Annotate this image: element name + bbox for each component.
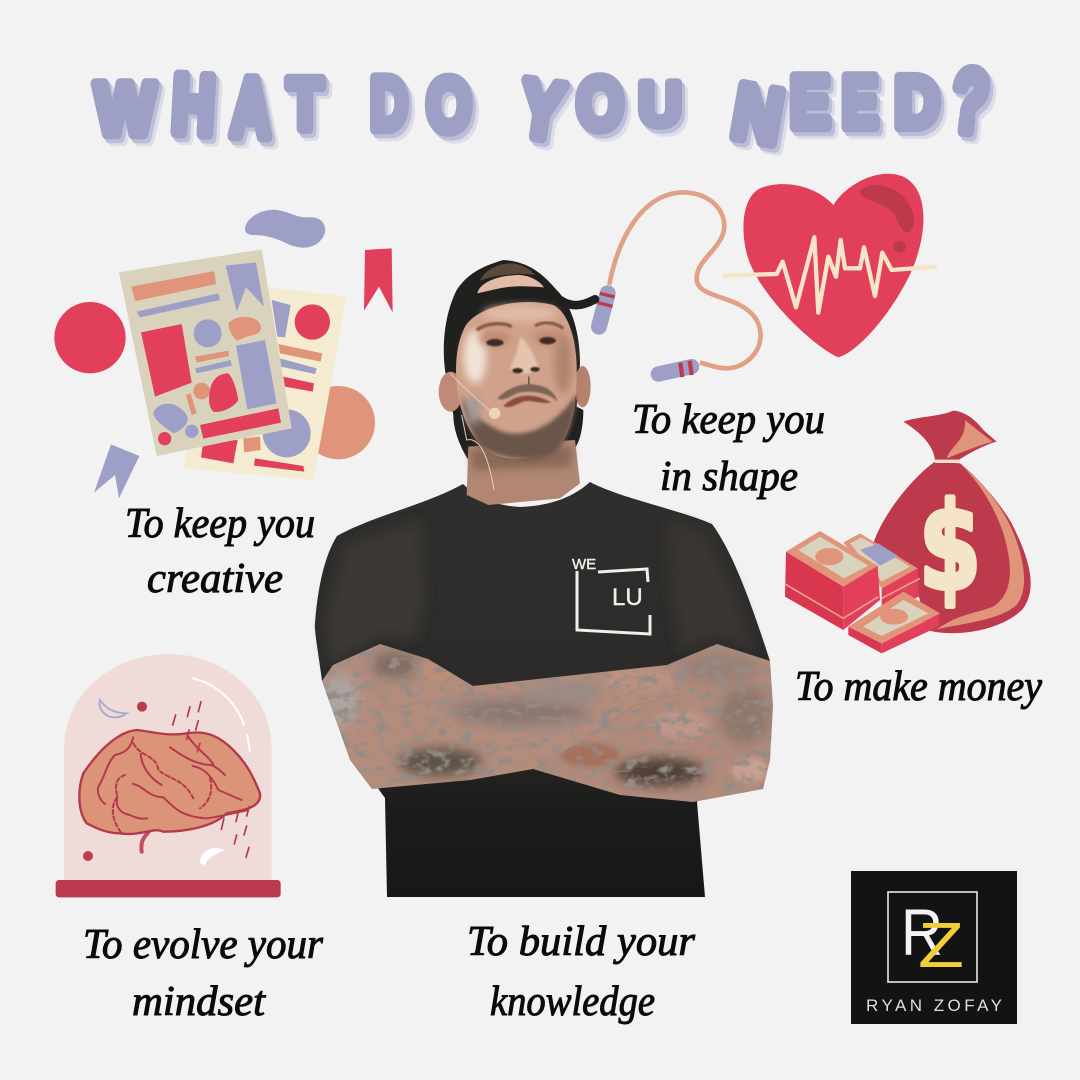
eyebrows [477, 324, 512, 330]
title: What do you need?: H [170, 58, 217, 153]
head [439, 260, 595, 505]
nose [510, 337, 538, 374]
title: What do you need?: ? [947, 51, 993, 152]
caption: to evolve your mindset: mindset [132, 979, 266, 1025]
caption: to make money: To make money [795, 664, 1042, 710]
lower crossed arm [533, 644, 773, 802]
caption: to keep you creative [125, 501, 315, 602]
rope [609, 192, 761, 368]
caption: to keep you in shape: To keep you [632, 397, 825, 443]
lower handle [658, 361, 692, 377]
neck [467, 440, 580, 505]
bag neck [903, 411, 997, 460]
left cash stack [785, 531, 880, 630]
caption: to keep you in shape: in shape [660, 454, 798, 500]
title: What do you need?: N [726, 68, 789, 161]
dome base [56, 880, 281, 897]
shirt logo: WE LU [572, 556, 650, 634]
title: What do you need?: T [287, 64, 323, 144]
person: man with crossed arms [310, 260, 790, 897]
bag side [937, 465, 1024, 629]
title: What do you need?: O [577, 63, 623, 145]
upper crossed arm [322, 644, 680, 789]
shirt [315, 482, 770, 897]
upper handle [598, 293, 615, 327]
logo: Ryan Zofay [851, 871, 1017, 1024]
heart highlight [860, 185, 914, 232]
beard [462, 393, 577, 459]
title: What do you need?: E [842, 60, 878, 143]
logo: Ryan Zofay: R [901, 895, 943, 969]
pulse line [725, 237, 935, 313]
title: What do you need?: W [95, 68, 155, 150]
brain [79, 730, 260, 852]
front cash stack [848, 592, 940, 653]
ears [439, 372, 463, 412]
caption: to keep you creative: To keep you [125, 501, 315, 547]
title: What do you need?: A [229, 60, 273, 154]
logo: Ryan Zofay: Z [918, 909, 964, 981]
title: What do you need? [95, 51, 993, 161]
dots [137, 702, 147, 712]
rear cash stack [843, 533, 920, 613]
front paper [119, 249, 292, 456]
bag body [873, 462, 1031, 633]
title: What do you need?: Y [515, 64, 569, 157]
dollar sign: $ [919, 477, 981, 617]
purple bookmark [94, 444, 139, 498]
title: What do you need?: U [639, 69, 681, 138]
illustration: heart with pulse [725, 174, 935, 357]
skin above strap [477, 275, 544, 293]
salmon circle [302, 386, 375, 459]
floating crescent [100, 700, 127, 717]
mouth [503, 396, 552, 407]
glass dome [64, 654, 272, 883]
illustration: jump rope [598, 192, 761, 377]
purple blob [245, 210, 325, 248]
illustration: money bag and cash [785, 411, 1031, 653]
logo: Ryan Zofay: RYAN ZOFAY [866, 996, 1002, 1015]
red bookmark [364, 248, 393, 313]
illustration: brain under glass dome [56, 654, 281, 897]
eyes [486, 339, 504, 346]
cap and hair behind [444, 260, 583, 460]
caption: to keep you creative: creative [147, 556, 283, 602]
title: What do you need?: O [427, 65, 471, 148]
title: What do you need?: D [370, 62, 408, 145]
dome highlights [193, 678, 250, 752]
caption: to build your knowledge [467, 919, 696, 1025]
caption: to keep you in shape [632, 397, 825, 500]
caption: to build your knowledge: knowledge [490, 979, 655, 1025]
shirt logo: WE LU: LU [612, 584, 643, 611]
red circle [54, 302, 126, 373]
back paper [183, 287, 347, 480]
illustration: creative papers and shapes [54, 210, 393, 498]
caption: to build your knowledge: To build your [467, 919, 696, 965]
shirt logo: WE LU: WE [572, 556, 596, 573]
title: What do you need?: E [790, 61, 830, 143]
caption: to evolve your mindset: To evolve your [83, 922, 324, 968]
caption: to evolve your mindset [83, 922, 324, 1025]
heart shape [743, 174, 923, 357]
headband strap [477, 291, 595, 305]
headset mic [450, 373, 500, 490]
title: What do you need?: D [895, 63, 939, 143]
rain dashes [173, 702, 249, 857]
shirt shading [325, 520, 755, 665]
moustache [497, 384, 558, 402]
face [456, 302, 577, 459]
